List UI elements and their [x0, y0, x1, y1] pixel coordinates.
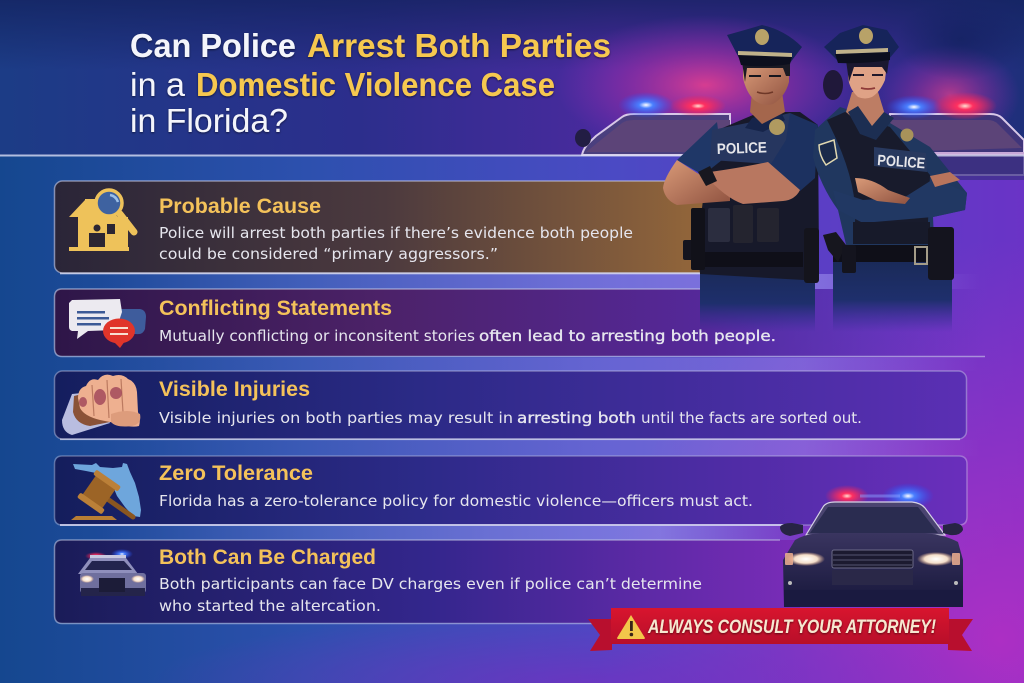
text block: Police will arrest both parties if there’s evidence both people: [159, 224, 633, 242]
forearm across body: [833, 178, 967, 223]
heading: Probable Cause: [159, 195, 321, 218]
hair bun: [823, 70, 843, 100]
title: in Florida?: [130, 102, 288, 139]
tactical vest: [710, 113, 790, 164]
icon: Florida and gavel: [71, 463, 141, 520]
duty gear: [683, 205, 819, 283]
duty gear: [823, 222, 954, 280]
police car, front view: [780, 483, 963, 607]
panel: probable cause: [54, 181, 714, 274]
text block: until the facts are sorted out.: [641, 409, 862, 427]
heading: Conflicting Statements: [159, 297, 392, 320]
title: Arrest Both Parties: [307, 27, 611, 64]
text block: could be considered “primary aggressors.”: [159, 245, 498, 263]
text block: Visible injuries on both parties may result in: [159, 409, 513, 427]
heading: Zero Tolerance: [159, 462, 313, 485]
heading: Visible Injuries: [159, 378, 310, 401]
title: Can Police: [130, 27, 296, 64]
neck and face: [750, 92, 785, 124]
cap: [727, 25, 802, 63]
text block: arresting both: [517, 409, 636, 427]
text block: often lead to arresting both people.: [479, 327, 776, 345]
sleeves: [677, 122, 722, 175]
tactical vest: [827, 112, 930, 222]
icon: small police car: [78, 549, 146, 596]
icon: speech bubbles: [69, 299, 146, 348]
text block: [159, 409, 862, 427]
neck and face: [846, 92, 886, 130]
title: [130, 27, 611, 139]
text block: who started the altercation.: [159, 597, 381, 615]
officer: male: [663, 25, 819, 332]
torso and sleeves: [813, 107, 967, 262]
torso: [698, 112, 819, 280]
text block: [159, 327, 776, 345]
text block: Florida has a zero-tolerance policy for domestic violence—officers must act.: [159, 492, 753, 510]
police label: POLICE: [877, 152, 926, 172]
crossed arms: [663, 160, 730, 205]
header band: [0, 0, 1024, 155]
icon: warning triangle: [617, 615, 645, 639]
icon: bruised fist: [62, 375, 140, 435]
officer: female: [813, 25, 967, 332]
police cars behind officers: [575, 92, 1024, 180]
icon: house with magnifying glass: [69, 190, 134, 251]
banner text: ALWAYS CONSULT YOUR ATTORNEY!: [647, 616, 936, 638]
text block: Mutually conflicting or inconsitent stories: [159, 327, 475, 345]
panel: visible injuries: [54, 371, 966, 440]
text block: [159, 575, 702, 615]
heading: Both Can Be Charged: [159, 546, 376, 569]
panel: both can be charged: [54, 540, 800, 624]
panel: zero tolerance: [54, 456, 967, 526]
police label: POLICE: [717, 139, 767, 158]
title: Domestic Violence Case: [196, 66, 555, 103]
cap: [824, 25, 899, 60]
title: in a: [130, 66, 186, 103]
panel: conflicting statements: [54, 289, 985, 356]
text block: [159, 224, 633, 263]
header divider line: [0, 154, 1024, 156]
banner: always consult your attorney: [588, 608, 973, 651]
light strips between panels: [100, 274, 980, 540]
trousers: [700, 268, 815, 332]
text block: Both participants can face DV charges even if police can’t determine: [159, 575, 702, 593]
trousers: [833, 260, 952, 332]
